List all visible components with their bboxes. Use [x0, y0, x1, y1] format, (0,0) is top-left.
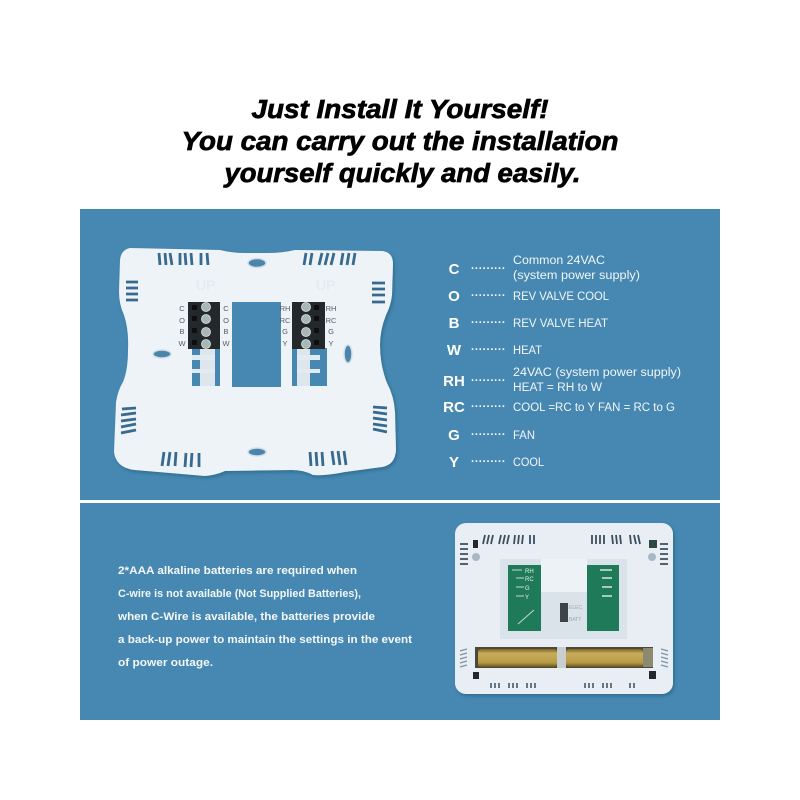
row: RH — [443, 367, 681, 394]
center cover and switch: BATT — [569, 617, 581, 623]
row: C: C — [449, 261, 460, 278]
battery note text: when C-Wire is available, the batteries provide — [117, 611, 375, 623]
mounting holes — [153, 258, 352, 456]
battery note text: of power outage. — [118, 657, 213, 669]
vents — [460, 535, 668, 564]
terminal block right: RC — [280, 316, 291, 325]
wiring legend — [443, 255, 681, 471]
center opening — [232, 302, 281, 387]
label: UP: UP — [196, 277, 215, 293]
circuit board left — [508, 565, 541, 631]
row: C — [449, 255, 640, 282]
icon: thermostat back with batteries — [455, 523, 673, 694]
terminal block right: RH — [280, 304, 290, 313]
terminal block right: Y — [328, 339, 334, 348]
row: C: ········· — [471, 263, 506, 275]
terminal block right: RC — [326, 316, 337, 325]
row: Y: ········· — [471, 456, 506, 468]
label: UP: UP — [316, 277, 335, 293]
row: W: HEAT — [513, 345, 542, 357]
row: RH: RH — [443, 373, 465, 390]
row: Y: Y — [449, 454, 459, 471]
title: Just Install It Yourself! — [252, 96, 549, 124]
battery note text: C-wire is not available (Not Supplied Batteries), — [118, 588, 361, 600]
terminal block right: Y — [282, 339, 288, 348]
circuit board right — [587, 565, 619, 631]
circuit board left: G — [525, 586, 530, 592]
battery note text: a back-up power to maintain the settings in the event — [118, 634, 412, 646]
slots and side channels — [192, 348, 327, 386]
row: W: W — [447, 342, 462, 359]
row: RH: 24VAC (system power supply) — [513, 367, 681, 379]
square clips and posts — [472, 540, 657, 679]
row: RH: ········· — [471, 375, 506, 387]
terminal block right: RH — [326, 304, 336, 313]
icon: wall mounting plate — [114, 248, 396, 476]
battery note text: 2*AAA alkaline batteries are required when — [118, 565, 357, 577]
recess — [500, 559, 627, 639]
row: O: REV VALVE COOL — [513, 291, 610, 303]
title: You can carry out the installation — [182, 128, 618, 156]
row: C: Common 24VAC — [513, 255, 605, 267]
row: G — [448, 427, 535, 444]
row: RC: ········· — [471, 401, 506, 413]
row: O: O — [448, 288, 460, 305]
row: B: ········· — [471, 317, 506, 329]
row: G: ········· — [471, 429, 506, 441]
title — [182, 96, 618, 188]
row: O: ········· — [471, 290, 506, 302]
terminal block left: O — [223, 316, 229, 325]
terminal block left: C — [223, 304, 229, 313]
terminal block right: G — [328, 327, 334, 336]
row: O — [448, 288, 610, 305]
terminal block right — [280, 302, 337, 349]
panel: wiring terminals — [80, 209, 720, 500]
circuit board left: RC — [525, 577, 534, 583]
center cover and switch: ELEC — [569, 605, 582, 611]
row: RH: HEAT = RH to W — [513, 382, 602, 394]
row: Y — [449, 454, 545, 471]
terminal block left: C — [179, 304, 185, 313]
label: UP — [196, 277, 335, 293]
battery note text — [117, 565, 412, 669]
circuit board left: RH — [525, 569, 534, 575]
terminal block left: B — [179, 327, 185, 336]
panel: batteries — [80, 503, 720, 720]
vents — [121, 253, 387, 467]
row: W — [447, 342, 542, 359]
batteries — [475, 647, 653, 668]
row: B: REV VALVE HEAT — [513, 318, 608, 330]
row: RC: RC — [443, 399, 465, 416]
title: yourself quickly and easily. — [222, 160, 580, 188]
terminal block left: W — [222, 339, 230, 348]
row: C: (system power supply) — [513, 270, 640, 282]
row: RC: COOL =RC to Y FAN = RC to G — [513, 402, 675, 414]
terminal block left: B — [223, 327, 229, 336]
terminal block right: G — [282, 327, 288, 336]
row: B: B — [449, 315, 460, 332]
center cover and switch — [541, 559, 587, 623]
row: B — [449, 315, 608, 332]
row: RC — [443, 399, 675, 416]
row: Y: COOL — [513, 457, 545, 469]
row: W: ········· — [471, 344, 506, 356]
terminal block left: W — [178, 339, 186, 348]
row: G: G — [448, 427, 460, 444]
terminal block left: O — [179, 316, 185, 325]
row: G: FAN — [513, 430, 535, 442]
terminal block left — [178, 302, 230, 349]
circuit board left: Y — [525, 595, 529, 601]
